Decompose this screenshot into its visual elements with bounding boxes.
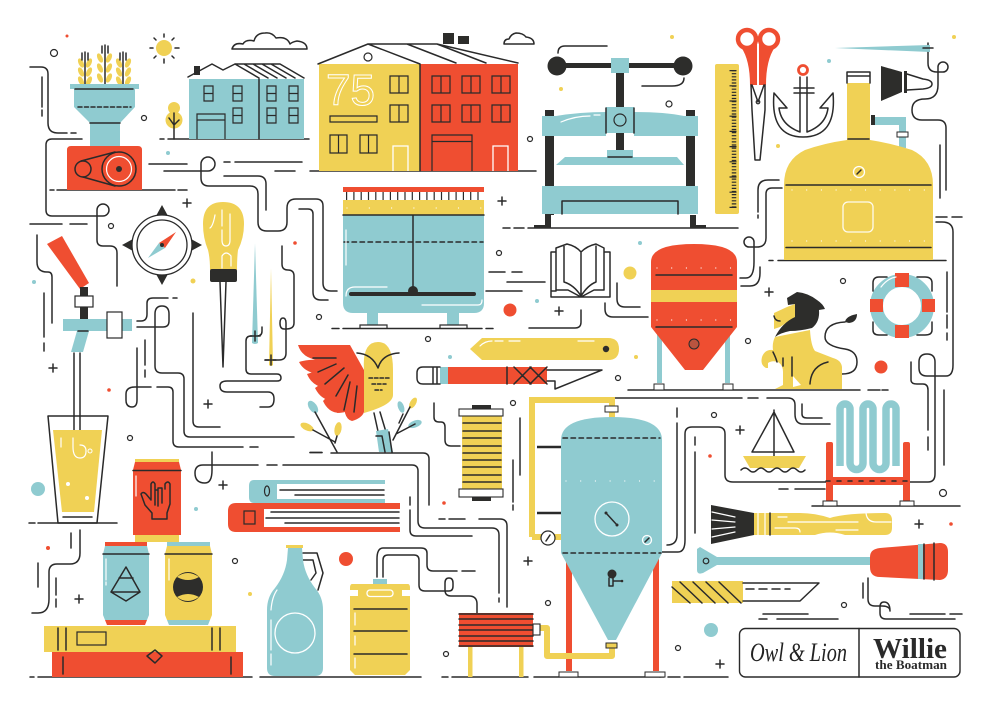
machine: mash tank	[343, 187, 484, 329]
building: yellow and red 75 warehouse: 75	[326, 66, 375, 115]
icon: life ring	[870, 273, 935, 338]
tool: scissors	[738, 30, 778, 160]
logo box: Owl & Lion and Willie the Boatman: the Boatman	[875, 657, 948, 672]
icon: yellow can with ball	[165, 542, 212, 625]
logo box: Owl & Lion and Willie the Boatman: Willie	[873, 634, 947, 665]
logo box: Owl & Lion and Willie the Boatman: Owl & Lion	[750, 638, 847, 667]
tool: paddle	[697, 543, 948, 580]
icon: lion	[762, 292, 857, 389]
tool: yellow bone folder	[470, 338, 619, 360]
icon: beer glass	[48, 416, 108, 523]
icon: sun	[150, 34, 179, 63]
icon: two lying books	[228, 480, 400, 532]
machine: teal fermenter with yellow pipes	[532, 400, 665, 677]
machine: red radiator with pipe	[459, 613, 617, 677]
tool: ruler	[715, 64, 739, 214]
tool: yellow needle	[265, 268, 276, 366]
icon: small cloud	[504, 33, 534, 44]
tool: beer tap	[47, 236, 132, 430]
machine: red conical fermenter	[651, 244, 737, 390]
tool: compass	[122, 205, 202, 285]
tool: funnel clamp and teal needle	[835, 45, 933, 101]
building: blue house	[188, 64, 304, 139]
building: yellow and red 75 warehouse	[318, 33, 518, 171]
icon: wheat hopper and mill motor	[67, 45, 142, 190]
tool: light bulb awl	[203, 202, 244, 367]
ground lines	[29, 139, 888, 677]
machine: keg	[350, 579, 410, 675]
logo box: Owl & Lion and Willie the Boatman	[740, 628, 960, 677]
machine: printing press	[534, 56, 706, 228]
icon: open book	[551, 244, 610, 297]
icon: teal can with diamond	[103, 542, 149, 625]
tool: craft knife	[417, 367, 602, 389]
tool: chisel	[672, 581, 819, 603]
icon: stacked yellow and red books	[44, 626, 243, 677]
icon: red can with rock hand	[133, 459, 181, 542]
icon: leafy branches	[299, 396, 423, 452]
tool: teal needle	[250, 243, 260, 344]
machine: yellow thread spool	[459, 405, 503, 501]
tool: brush	[711, 505, 892, 544]
icon: owl with spread wing	[298, 342, 399, 452]
machine: yellow brew kettle	[784, 72, 933, 260]
icon: yellow tree	[166, 102, 182, 139]
machine: coil on red frame	[823, 404, 914, 506]
icon: anchor	[774, 66, 833, 137]
icon: large cloud	[232, 33, 307, 49]
icon: growler bottle	[267, 545, 323, 676]
icon: sailboat	[741, 410, 806, 472]
